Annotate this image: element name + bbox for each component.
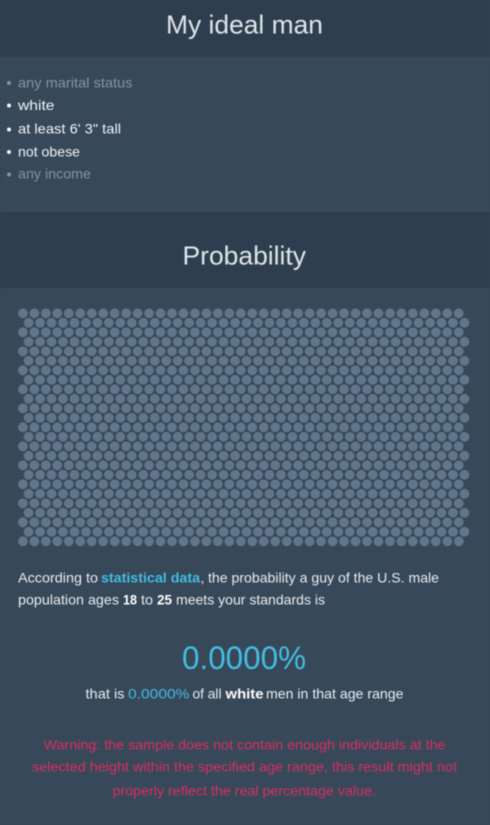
criterion: white: white [17,97,55,113]
text block: share of white men: 0.0000% [128,686,190,702]
warning message: Warning: the sample does not contain enough individuals at the [44,736,446,752]
criterion: not obese: not obese [18,144,80,160]
text block: share of white men [86,686,404,702]
header: My ideal man: My ideal man [166,10,323,40]
warning message: properly reflect the real percentage value. [112,782,376,798]
text block: explanation: 18 [123,592,137,608]
text block: explanation: , [200,570,204,586]
header: My ideal man [0,0,490,57]
text block: explanation: meets your standards is [176,592,325,608]
criterion: any income: any income [18,166,91,182]
criterion: height: at least 6' 3" tall [18,120,121,136]
big percentage result: 0.0000% [182,640,306,676]
panel: criteria list [7,74,132,182]
text block: explanation [18,570,439,608]
text block: explanation: the probability a guy of the U.S. male [208,570,439,586]
text block: share of white men: of all [192,686,222,702]
text block: explanation: According to [18,570,98,586]
text block: share of white men: white [224,686,264,702]
header: Probability: Probability [182,240,306,270]
dot grid: population of men [23,313,465,541]
text block: share of white men: men in that age range [266,686,404,702]
warning message: selected height within the specified age range, this result might not [32,758,457,774]
header: Probability [0,212,490,288]
text block: explanation: to [141,592,153,608]
text block: explanation: population ages [18,592,119,608]
warning message [32,736,457,798]
text block: explanation: statistical data [101,570,200,586]
text block: explanation: 25 [157,592,172,608]
criterion: any marital status: any marital status [18,74,132,90]
text block: share of white men: that is [86,686,124,702]
